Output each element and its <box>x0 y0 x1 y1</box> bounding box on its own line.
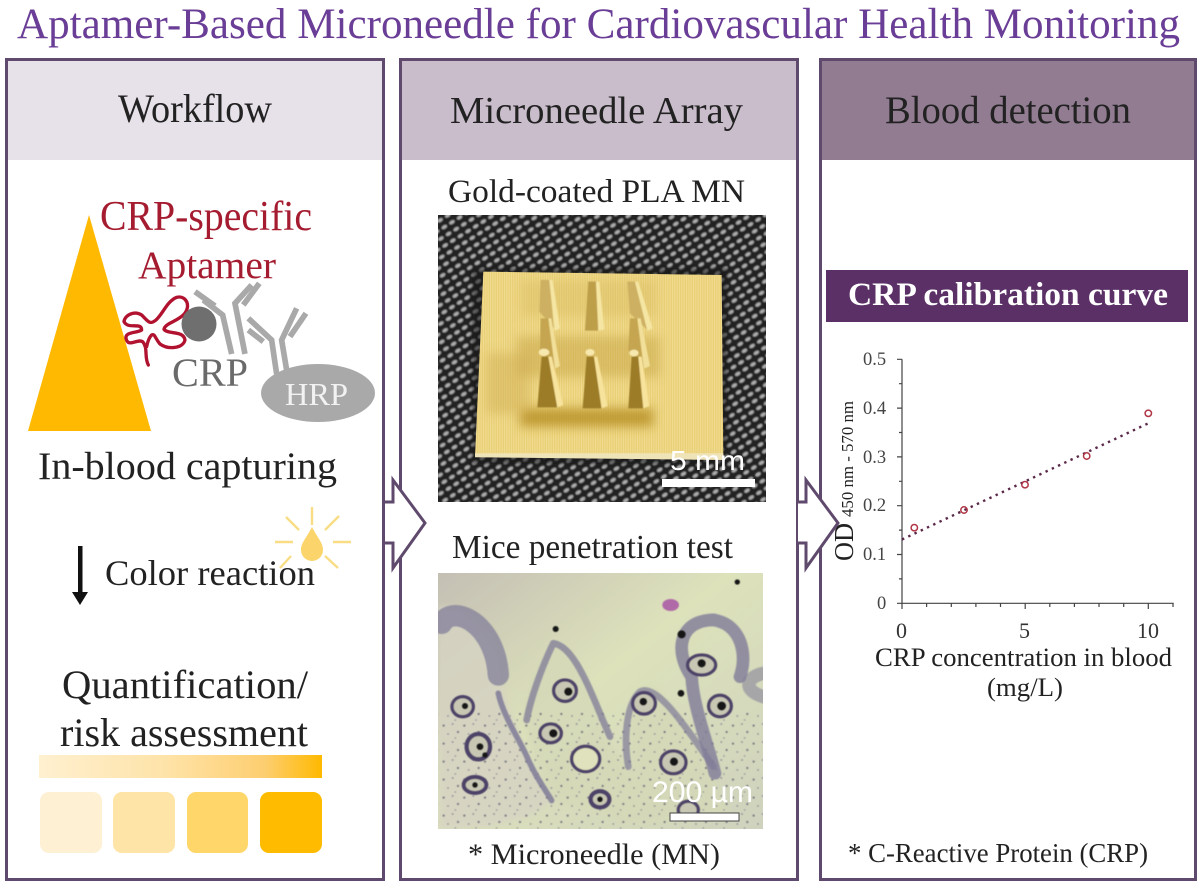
axes <box>897 359 1174 609</box>
needles <box>537 280 653 408</box>
CRP-specific label: CRP-specific <box>100 194 312 240</box>
data points <box>911 410 1152 531</box>
scale bar <box>662 479 755 487</box>
color reaction arrow <box>72 546 88 605</box>
aptamer label: Aptamer <box>138 243 276 287</box>
antibodies <box>195 283 306 374</box>
y tick labels: 0.5 <box>863 350 886 370</box>
CRP protein circle <box>182 306 216 342</box>
risk assessment label: risk assessment <box>60 710 308 755</box>
y axis title: OD <box>829 523 859 561</box>
HRP label: HRP <box>285 376 348 412</box>
plate shadow <box>472 268 728 464</box>
panel outline <box>820 60 1196 880</box>
x tick labels <box>896 618 1159 643</box>
tissue fill <box>440 627 546 828</box>
HRP enzyme <box>261 364 375 422</box>
workflow header band <box>7 60 383 160</box>
trend line <box>902 423 1148 540</box>
x tick labels: 0 <box>896 618 907 643</box>
gold-coated caption: Gold-coated PLA MN <box>448 173 745 210</box>
CRP footnote: * C-Reactive Protein (CRP) <box>848 838 1148 868</box>
in-blood capturing label: In-blood capturing <box>38 445 337 488</box>
y axis title <box>829 401 859 561</box>
title: Aptamer-Based Microneedle for Cardiovascular Health Monitoring <box>17 0 1180 48</box>
icon: light and drop <box>275 507 351 568</box>
blood detection heading: Blood detection <box>885 90 1131 132</box>
y tick labels: 0 <box>877 594 886 614</box>
risk gradient bar <box>39 755 322 778</box>
scale label: 5 mm <box>670 445 745 476</box>
chart: CRP calibration curve <box>829 350 1174 702</box>
x tick labels: 10 <box>1137 618 1159 643</box>
plate mottling <box>487 280 660 427</box>
y axis title: 450 nm - 570 nm <box>838 401 857 517</box>
panel: blood detection <box>820 60 1196 880</box>
scale bar <box>670 813 739 821</box>
photo: tissue section <box>438 573 763 829</box>
cell nuclei <box>462 579 740 802</box>
gold plate <box>475 272 723 457</box>
workflow heading: Workflow <box>118 86 272 131</box>
tissue membranes <box>442 616 763 801</box>
calibration heading: CRP calibration curve <box>848 277 1168 313</box>
mice penetration caption: Mice penetration test <box>452 529 734 566</box>
microneedle tip triangle <box>28 215 151 431</box>
y tick labels: 0.4 <box>863 399 886 419</box>
microneedle header band <box>401 60 797 160</box>
color reaction label: Color reaction <box>105 553 315 593</box>
x tick labels: 5 <box>1019 618 1030 643</box>
blood detection header band <box>821 60 1195 160</box>
y tick labels: 0.3 <box>863 448 886 468</box>
panel: workflow <box>6 60 384 880</box>
pink stain <box>662 599 679 611</box>
quantification label: Quantification/ <box>62 662 309 707</box>
y tick labels <box>863 350 886 614</box>
aptamer squiggle <box>124 297 188 365</box>
arrow: workflow to microneedle <box>385 480 425 568</box>
panel outline <box>6 60 384 880</box>
x axis unit: (mg/L) <box>987 672 1063 702</box>
scattered specks <box>438 710 763 829</box>
scale label: 200 µm <box>652 776 753 809</box>
microneedle footnote: * Microneedle (MN) <box>468 838 720 871</box>
photo: gold-coated microneedle <box>434 211 770 506</box>
panel outline <box>400 60 798 880</box>
CRP label: CRP <box>172 350 248 395</box>
x axis title: CRP concentration in blood <box>875 642 1173 672</box>
microneedle heading: Microneedle Array <box>450 90 744 132</box>
arrow: microneedle to blood detection <box>798 480 838 568</box>
cells <box>452 655 731 819</box>
colour swatches <box>40 792 322 853</box>
panel: microneedle array <box>400 60 798 880</box>
calibration banner <box>826 270 1188 322</box>
y tick labels: 0.1 <box>863 545 886 565</box>
y tick labels: 0.2 <box>863 496 886 516</box>
